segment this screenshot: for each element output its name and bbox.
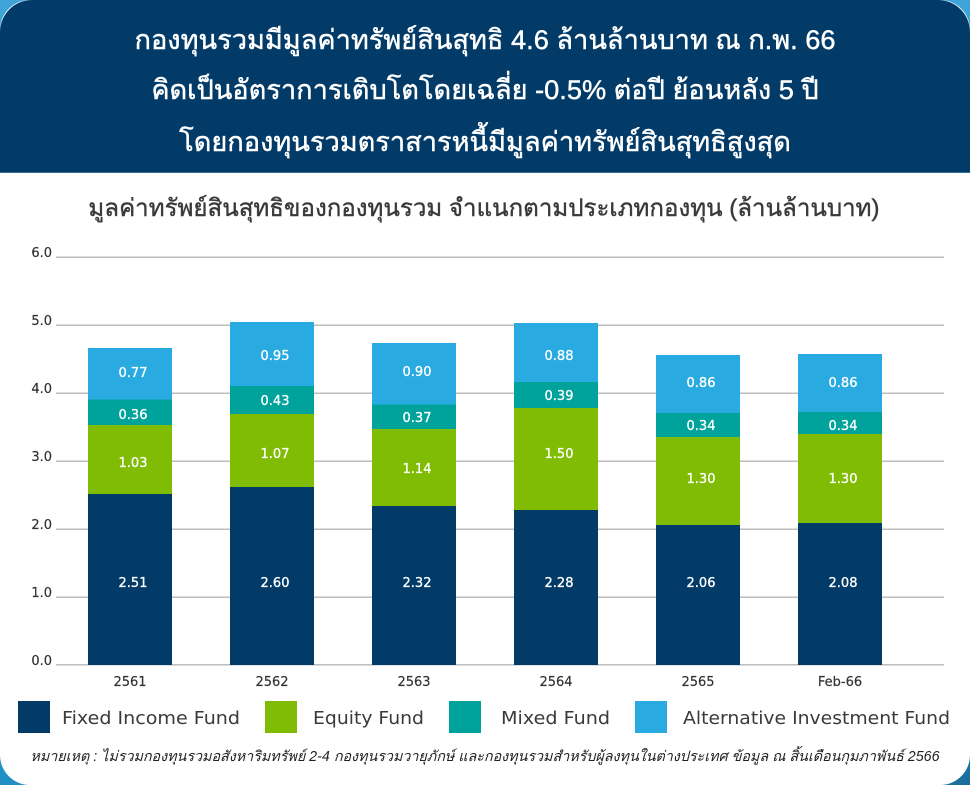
stacked bar: 2561 [88,348,172,665]
y axis with gridlines [31,246,944,669]
legend: Mixed Fund [501,708,610,729]
stacked bar: 2564 [514,323,598,665]
stacked bar: 2563: 2.32 [403,576,431,591]
stacked bar: 2564: 0.88 [545,349,573,364]
stacked bar: 2565: 0.86 [687,376,715,391]
stacked bar: 2561: 2.51 [119,576,147,591]
stacked bar: 2561: 1.03 [119,456,147,471]
x axis labels [113,675,862,690]
stacked bar: 2562: 2.60 [261,576,289,591]
y axis with gridlines: 4.0 [31,382,52,397]
stacked bar: Feb-66: 0.34 [829,419,857,434]
legend: Equity Fund [313,708,424,729]
stacked bar: 2561: 0.77 [119,366,147,381]
stacked bar: Feb-66: 2.08 [829,576,857,591]
y axis with gridlines: 6.0 [31,246,52,261]
x axis labels: Feb-66 [818,675,862,690]
title line 2: คิดเป็นอัตราการเติบโตโดยเฉลี่ย -0.5% ต่อปี ย้อนหลัง 5 ปี [151,74,819,105]
stacked bar: Feb-66: 1.30 [829,472,857,487]
legend [18,701,950,733]
legend: Alternative Investment Fund [683,708,950,729]
stacked bar: 2563: 0.90 [403,365,431,380]
y axis with gridlines: 0.0 [31,654,52,669]
stacked bar: Feb-66 [798,354,882,665]
x axis labels: 2565 [681,675,715,690]
stacked bar: 2564: 2.28 [545,576,573,591]
stacked bar: 2565 [656,355,740,665]
stacked bar: 2563 [372,343,456,665]
title line 1: กองทุนรวมมีมูลค่าทรัพย์สินสุทธิ 4.6 ล้านล้านบาท ณ ก.พ. 66 [135,24,835,55]
y axis with gridlines: 5.0 [31,314,52,329]
x axis labels: 2561 [113,675,147,690]
y axis with gridlines: 3.0 [31,450,52,465]
stacked bar: 2562: 0.95 [261,349,289,364]
stacked bar: 2565: 1.30 [687,472,715,487]
stacked bar: 2562: 0.43 [261,394,289,409]
stacked bar: 2563: 0.37 [403,411,431,426]
x axis labels: 2562 [255,675,289,690]
legend: Fixed Income Fund [62,708,240,729]
x axis labels: 2563 [397,675,431,690]
stacked bar: 2565: 2.06 [687,576,715,591]
stacked bar: 2562 [230,322,314,665]
y axis with gridlines: 2.0 [31,518,52,533]
stacked bar: 2565: 0.34 [687,419,715,434]
title line 3: โดยกองทุนรวมตราสารหนี้มีมูลค่าทรัพย์สินสุทธิสูงสุด [179,126,791,157]
y axis with gridlines: 1.0 [31,586,52,601]
stacked bar: 2564: 0.39 [545,389,573,404]
stacked bar: 2561: 0.36 [119,408,147,423]
stacked bar: 2564: 1.50 [545,447,573,462]
title banner [0,0,970,173]
chart title: มูลค่าทรัพย์สินสุทธิของกองทุนรวม จำแนกตามประเภทกองทุน (ล้านล้านบาท) [88,194,880,223]
footnote: หมายเหตุ : ไม่รวมกองทุนรวมอสังหาริมทรัพย์ 2-4 กองทุนรวมวายุภักษ์ และกองทุนรวมสำหรับผู้ลงทุนในต่างประเทศ ข้อมูล ณ สิ้นเดือนกุมภาพันธ์ 2566 [30,745,940,765]
x axis labels: 2564 [539,675,573,690]
stacked bar: Feb-66: 0.86 [829,376,857,391]
stacked bar: 2563: 1.14 [403,462,431,477]
stacked bar: 2562: 1.07 [261,447,289,462]
